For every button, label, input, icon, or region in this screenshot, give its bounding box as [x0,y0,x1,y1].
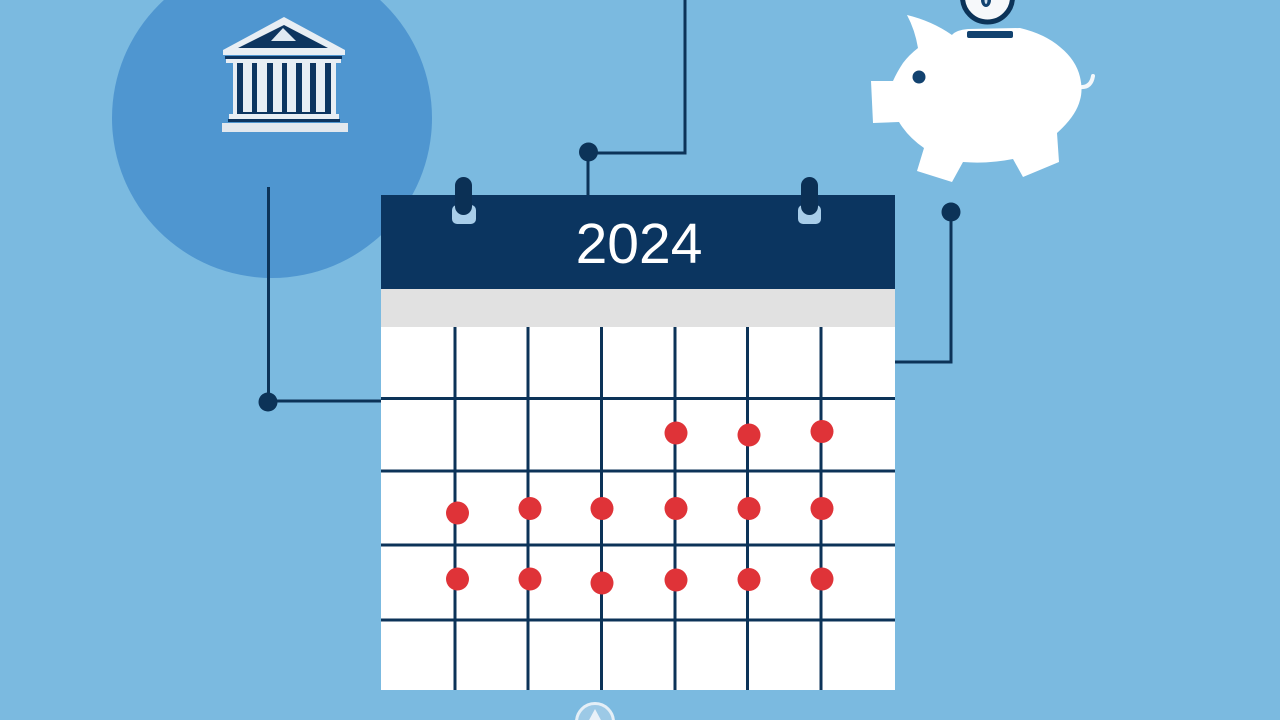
calendar weekday band [381,289,895,327]
icon: piggy bank coin slot [967,31,1013,38]
icon: bank building [222,17,348,132]
calendar red markers [446,420,834,594]
panel: bank circle [112,0,432,278]
panel: calendar [381,177,895,690]
heading: year: 2024 [576,212,702,276]
connector: bank to calendar [258,187,382,412]
icon: left binder ring [452,177,476,224]
connector: piggy bank to calendar [895,202,960,362]
calendar header [381,195,895,289]
connector: top to calendar [579,0,685,195]
icon: right binder ring [798,177,821,224]
calendar body [381,327,895,690]
calendar grid [381,327,895,690]
icon: piggy bank eye [912,70,926,84]
icon: bottom badge [576,704,614,720]
icon: coin [962,0,1012,22]
icon: piggy bank [871,15,1093,182]
